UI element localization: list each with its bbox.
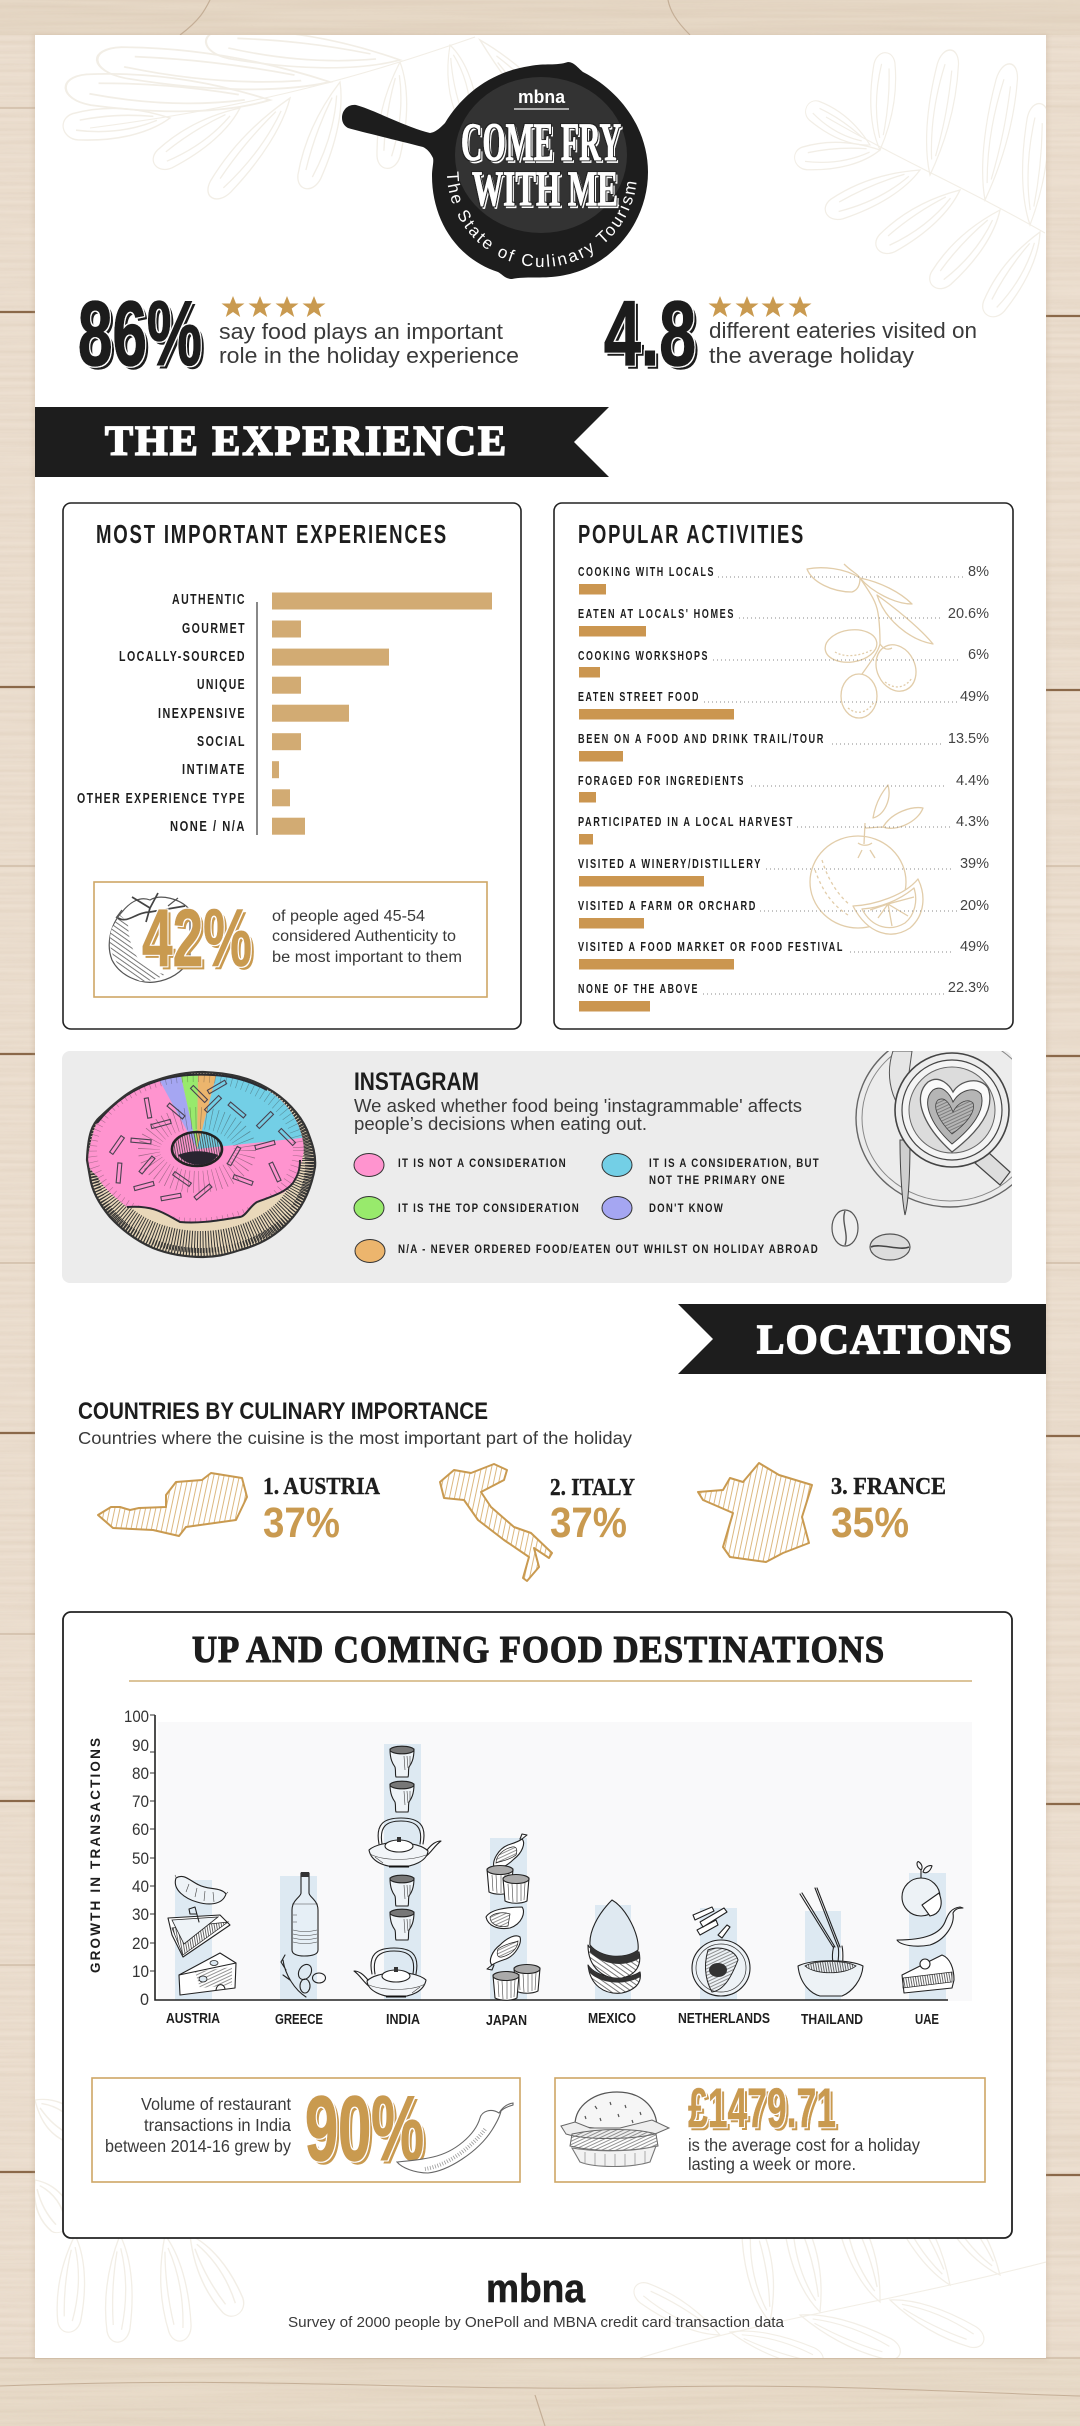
panel: popular activities — [554, 503, 1013, 1029]
country: france — [698, 1463, 946, 1562]
chart — [88, 1707, 972, 2029]
activity rows: 20.6% — [948, 606, 989, 622]
country: france: 3. FRANCE — [831, 1474, 946, 1500]
legend: IT IS THE TOP CONSIDERATION — [398, 1203, 580, 1215]
icons: japan — [486, 1834, 540, 2000]
x axis labels: NETHERLANDS — [678, 2011, 770, 2027]
country: italy: 2. ITALY — [550, 1475, 635, 1501]
activity rows: NONE OF THE ABOVE — [578, 982, 699, 996]
x axis labels — [166, 2011, 939, 2029]
bar chart: INTIMATE — [182, 762, 246, 778]
icons: mexico — [588, 1900, 640, 1993]
icons: austria — [168, 1875, 236, 1995]
icons: netherlands — [692, 1907, 750, 1996]
country: italy — [440, 1464, 635, 1581]
callout: 42%: be most important to them — [272, 949, 462, 966]
callout: 90%: Volume of restaurant — [141, 2094, 291, 2114]
icon: orange — [810, 785, 923, 934]
stat: 4.8 — [604, 283, 977, 385]
chart: 40 — [132, 1877, 149, 1896]
logo: mbna — [486, 2267, 586, 2311]
activity rows: VISITED A WINERY/DISTILLERY — [578, 857, 762, 871]
chart: 50 — [132, 1849, 149, 1868]
callout: £1479.71: lasting a week or more. — [688, 2154, 856, 2174]
x axis labels: THAILAND — [801, 2012, 863, 2028]
activity rows: EATEN AT LOCALS' HOMES — [578, 607, 735, 621]
chart: 70 — [132, 1792, 149, 1811]
country: austria — [98, 1473, 381, 1547]
callout: 90%: transactions in India — [144, 2115, 291, 2135]
icon: pan silhouette — [342, 62, 648, 279]
icon: chili — [397, 2103, 513, 2173]
activity rows: 49% — [960, 689, 989, 705]
x axis labels: GREECE — [275, 2012, 323, 2028]
title lines: COME FRY — [461, 112, 621, 172]
stat: 86% — [78, 283, 519, 385]
legend — [354, 1154, 820, 1262]
callout: £1479.71: £1479.71 — [688, 2076, 836, 2139]
activity rows: COOKING WORKSHOPS — [578, 649, 709, 663]
activity rows: 49% — [960, 939, 989, 955]
stat: 4.8: 4.8 — [604, 283, 696, 385]
legend: IT IS NOT A CONSIDERATION — [398, 1158, 567, 1170]
panel: up and coming food destinations — [63, 1612, 1012, 2238]
activity rows — [578, 564, 989, 1012]
section banner: locations — [678, 1304, 1046, 1374]
intro text — [354, 1096, 802, 1134]
x axis labels: AUSTRIA — [166, 2011, 220, 2027]
chart: 100 — [124, 1707, 149, 1726]
country: austria: 1. AUSTRIA — [263, 1474, 381, 1500]
activity rows: VISITED A FOOD MARKET OR FOOD FESTIVAL — [578, 940, 844, 954]
frying pan title — [342, 62, 648, 279]
activity rows: 13.5% — [948, 731, 989, 747]
activity rows: 6% — [968, 647, 989, 663]
legend: NOT THE PRIMARY ONE — [649, 1175, 786, 1187]
chart: 60 — [132, 1820, 149, 1839]
activity rows: 4.3% — [956, 814, 989, 830]
icons: uae — [897, 1862, 963, 1993]
chart: 0 — [140, 1990, 149, 2009]
icons: greece — [281, 1872, 326, 1997]
x axis labels: UAE — [915, 2012, 939, 2028]
callout: 42%: of people aged 45-54 — [272, 908, 425, 925]
icons: india — [354, 1746, 441, 1997]
chart: 20 — [132, 1934, 149, 1953]
heading: MOST IMPORTANT EXPERIENCES — [96, 519, 448, 549]
stat: 4.8: the average holiday — [709, 343, 914, 368]
legend: N/A - NEVER ORDERED FOOD/EATEN OUT WHILST ON HOLIDAY ABROAD — [398, 1244, 819, 1256]
bar chart: SOCIAL — [197, 734, 246, 750]
icon: olive branch — [807, 564, 933, 718]
stat: 4.8: different eateries visited on — [709, 318, 977, 343]
heading: countries by culinary importance: COUNTRIES BY CULINARY IMPORTANCE — [78, 1398, 488, 1425]
intro text: We asked whether food being 'instagrammable' affects — [354, 1096, 802, 1116]
x axis labels: INDIA — [386, 2012, 420, 2028]
stat: 86%: 86% — [78, 283, 202, 385]
activity rows: EATEN STREET FOOD — [578, 690, 700, 704]
icon: burger — [561, 2092, 669, 2166]
chart: 90 — [132, 1736, 149, 1755]
bar chart: AUTHENTIC — [172, 592, 246, 608]
donut pie chart — [80, 1065, 320, 1257]
section banner: the experience: THE EXPERIENCE — [105, 419, 508, 465]
legend: IT IS A CONSIDERATION, BUT — [649, 1158, 820, 1170]
chart: 80 — [132, 1764, 149, 1783]
stat: 86%: role in the holiday experience — [219, 343, 519, 368]
section banner: locations: LOCATIONS — [757, 1316, 1013, 1362]
callout: £1479.71 — [555, 2076, 985, 2182]
intro text: people’s decisions when eating out. — [354, 1114, 647, 1134]
heading: countries by culinary importance — [78, 1398, 632, 1448]
bar chart: NONE / N/A — [170, 819, 246, 835]
heading: INSTAGRAM — [354, 1068, 479, 1096]
icon: tomato — [109, 893, 190, 982]
icon: coffee beans — [832, 1210, 910, 1260]
x axis labels: JAPAN — [486, 2013, 527, 2029]
heading: UP AND COMING FOOD DESTINATIONS — [192, 1629, 885, 1671]
section banner: the experience — [35, 407, 609, 477]
chart: 10 — [132, 1962, 149, 1981]
bar chart: INEXPENSIVE — [158, 706, 246, 722]
source: Survey of 2000 people by OnePoll and MBNA credit card transaction data — [288, 2315, 785, 2331]
callout: 42% — [94, 882, 487, 997]
icons: thailand — [798, 1888, 863, 1996]
activity rows: 39% — [960, 856, 989, 872]
bar chart: LOCALLY-SOURCED — [119, 649, 246, 665]
activity rows: 22.3% — [948, 980, 989, 996]
frying pan title: WITH ME — [472, 160, 618, 216]
panel: instagram — [62, 1051, 1012, 1283]
stat: 86%: say food plays an important — [219, 319, 503, 344]
activity rows: VISITED A FARM OR ORCHARD — [578, 899, 757, 913]
country: italy: 37% — [550, 1499, 627, 1547]
subtitle on arc: The State of Culinary Tourism — [447, 172, 636, 268]
callout: 90%: 90% — [305, 2078, 424, 2180]
x axis labels: MEXICO — [588, 2011, 636, 2027]
country: france: 35% — [831, 1499, 909, 1547]
activity rows: 4.4% — [956, 773, 989, 789]
activity rows: 8% — [968, 564, 989, 580]
bar chart — [77, 592, 492, 835]
callout: 42%: 42% — [142, 893, 252, 984]
activity rows: COOKING WITH LOCALS — [578, 565, 715, 579]
heading: POPULAR ACTIVITIES — [578, 519, 805, 549]
activity rows: 20% — [960, 898, 989, 914]
pan inner circle — [455, 77, 627, 233]
bar chart: UNIQUE — [197, 677, 246, 693]
y axis title: GROWTH IN TRANSACTIONS — [88, 1738, 103, 1973]
activity rows: BEEN ON A FOOD AND DRINK TRAIL/TOUR — [578, 732, 825, 746]
callout: 90% — [92, 2078, 520, 2182]
callout: £1479.71: is the average cost for a holiday — [688, 2135, 920, 2155]
callout: 42%: considered Authenticity to — [272, 928, 456, 945]
panel: most important experiences — [63, 503, 521, 1029]
logo: mbna — [518, 87, 566, 107]
footer — [288, 2267, 785, 2331]
icon: coffee cup — [855, 1051, 1012, 1216]
bar chart: GOURMET — [182, 621, 246, 637]
heading: countries by culinary importance: Countries where the cuisine is the most important part of the holiday — [78, 1428, 632, 1448]
chart: 30 — [132, 1905, 149, 1924]
activity rows: PARTICIPATED IN A LOCAL HARVEST — [578, 815, 794, 829]
legend: DON'T KNOW — [649, 1203, 724, 1215]
country: austria: 37% — [263, 1499, 340, 1547]
bar chart: OTHER EXPERIENCE TYPE — [77, 791, 246, 807]
activity rows: FORAGED FOR INGREDIENTS — [578, 774, 745, 788]
callout: 90%: between 2014-16 grew by — [105, 2136, 291, 2156]
